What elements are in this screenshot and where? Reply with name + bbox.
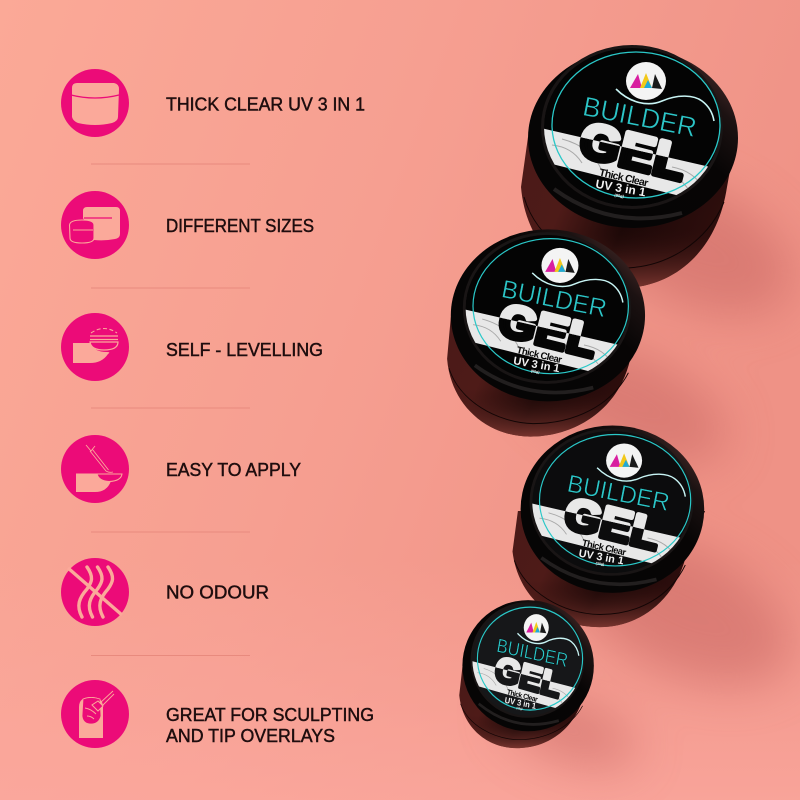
jar: small (459, 600, 596, 748)
label: tip overlays: AND TIP OVERLAYS (166, 726, 335, 746)
UV 3 in 1: UV 3 in 1 (504, 695, 537, 711)
GEL lower: GEL (493, 294, 603, 368)
lid (451, 229, 645, 401)
cyan ring (473, 239, 628, 374)
icon: crossed out odour waves (61, 558, 129, 626)
feature 1: thick clear (61, 69, 365, 137)
icon: two jars (61, 191, 129, 259)
dividers (91, 164, 250, 656)
label: self levelling: SELF - LEVELLING (166, 340, 323, 360)
thick clear: Thick Clear (515, 345, 563, 366)
BUILDER: BUILDER (499, 275, 609, 323)
feature 3: self levelling (61, 313, 323, 381)
feature 4: easy to apply (61, 435, 301, 503)
label: different sizes: DIFFERENT SIZES (166, 216, 314, 236)
weight: (90g) (614, 192, 625, 199)
thick clear: Thick Clear (598, 167, 649, 190)
lid (528, 45, 738, 228)
GEL upper: GEL (491, 650, 565, 706)
jar: large (521, 45, 742, 288)
logo (541, 248, 578, 283)
icon: nail with levelling gel (61, 313, 129, 381)
thick clear: Thick Clear (581, 538, 627, 559)
feature 6: sculpting (61, 680, 374, 748)
icon: nail with brush (61, 680, 129, 748)
GEL upper: GEL (493, 294, 603, 368)
jar: medium large (445, 229, 649, 437)
jar body (447, 317, 643, 437)
swoosh (616, 89, 714, 121)
label: easy to apply: EASY TO APPLY (166, 460, 301, 480)
cyan ring (552, 52, 720, 198)
label face (532, 431, 690, 573)
cyan ring (477, 607, 583, 710)
label: no odour: NO ODOUR (166, 582, 269, 602)
logo (524, 614, 549, 641)
jar shadows (494, 144, 800, 782)
BUILDER: BUILDER (495, 634, 570, 671)
swoosh (517, 633, 579, 656)
swoosh (597, 468, 685, 497)
jar body (521, 137, 736, 288)
lid (462, 600, 594, 731)
icon: brush on nail (61, 435, 129, 503)
cyan ring (540, 434, 691, 566)
UV 3 in 1: UV 3 in 1 (595, 177, 647, 199)
GEL upper: GEL (559, 487, 666, 560)
label: sculpting: GREAT FOR SCULPTING (166, 705, 374, 725)
GEL lower: GEL (574, 111, 692, 191)
lid (521, 426, 704, 593)
logo (606, 444, 642, 478)
jar body (512, 511, 705, 627)
jar: medium (512, 426, 710, 627)
weight: (30g) (595, 561, 605, 567)
label face (544, 48, 720, 206)
weight: (15g) (516, 706, 523, 711)
label: thick clear: THICK CLEAR UV 3 IN 1 (166, 94, 365, 114)
jar body (459, 667, 593, 748)
thick clear: Thick Clear (506, 689, 538, 704)
feature 5: no odour (61, 558, 269, 626)
weight: (50g) (530, 369, 541, 374)
label face (466, 235, 628, 381)
feature 2: different sizes (61, 191, 314, 259)
GEL upper: GEL (574, 111, 692, 191)
label face (472, 632, 580, 708)
swoosh (532, 273, 623, 302)
logo (626, 62, 666, 100)
BUILDER: BUILDER (580, 90, 699, 143)
GEL lower: GEL (491, 650, 565, 706)
icon: jar (61, 69, 129, 137)
UV 3 in 1: UV 3 in 1 (578, 548, 625, 567)
GEL lower: GEL (559, 487, 666, 560)
BUILDER: BUILDER (565, 471, 672, 517)
UV 3 in 1: UV 3 in 1 (512, 355, 561, 375)
